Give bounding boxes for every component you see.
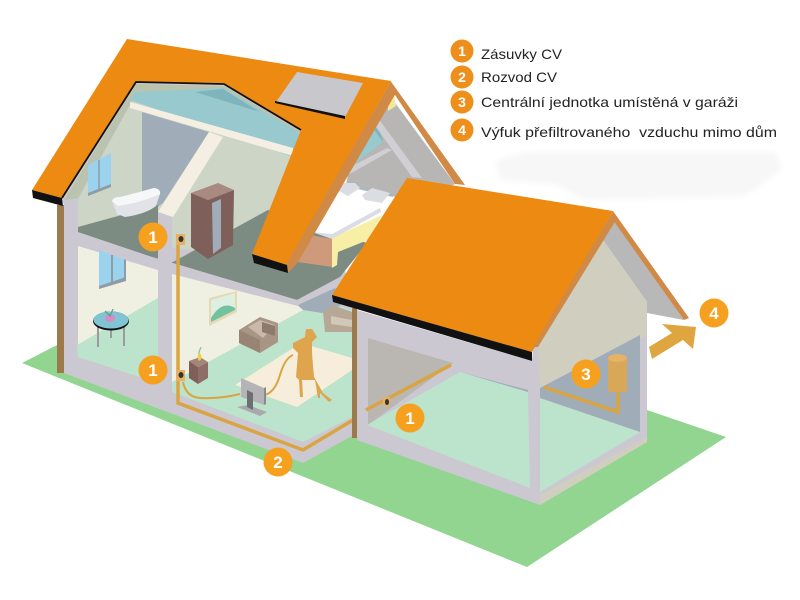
brown outer wall: [57, 205, 64, 373]
garage roof: [332, 178, 689, 361]
bed: [298, 183, 393, 268]
legend item 3: Centrální jednotka umístěná v garáži: [481, 94, 738, 110]
ceiling beam: [130, 102, 293, 156]
badge 1 downstairs: [138, 356, 168, 384]
legend item 2: Rozvod CV: [481, 69, 558, 85]
legend item 4: Výfuk přefiltrovaného vzduchu mimo dům: [481, 124, 777, 140]
garage structure: [357, 310, 647, 505]
pipe in garage: [366, 365, 451, 410]
legend item 4: 4: [458, 122, 466, 138]
wardrobe: [191, 183, 234, 259]
badge 2: 2: [273, 453, 283, 472]
pillar: [158, 212, 172, 400]
house body frame: [62, 82, 352, 463]
cross beam: [158, 132, 223, 217]
socket downstairs: [176, 370, 185, 381]
badge 4: [700, 298, 728, 328]
pipe to central unit: [544, 387, 618, 412]
brown post: [352, 308, 357, 438]
legend: [450, 40, 777, 142]
badge 1 downstairs: 1: [148, 361, 158, 380]
window lower: [99, 250, 126, 289]
sofa: [323, 305, 352, 332]
legend item 4: [450, 118, 777, 142]
lower left room: [77, 246, 158, 383]
garage back wall: [540, 335, 640, 432]
badge 3: [572, 360, 600, 388]
hose: [183, 355, 293, 398]
badge 1 garage: [396, 404, 424, 432]
window upper: [88, 153, 111, 196]
upper floor interior: [78, 88, 367, 300]
legend item 3: [450, 90, 738, 114]
legend item 1: Zásuvky CV: [481, 46, 563, 62]
picture: [209, 291, 237, 326]
garage socket: [383, 397, 390, 406]
garage gable: [603, 218, 684, 320]
lower right room: [172, 274, 352, 442]
bathtub: [112, 188, 160, 217]
badge 3: 3: [581, 365, 591, 384]
badge 1 garage: 1: [405, 409, 415, 428]
ceiling: [130, 88, 300, 157]
back wall: [142, 112, 209, 218]
floor slab: [78, 232, 342, 306]
legend item 1: [450, 40, 563, 62]
socket upstairs: [176, 234, 185, 245]
central unit: [608, 354, 627, 392]
armchair: [239, 317, 278, 353]
pipe: distribution: [178, 240, 353, 450]
monitor unit: [237, 378, 267, 416]
legend item 3: 3: [458, 94, 466, 110]
garage: [332, 178, 689, 505]
badge 4: 4: [709, 304, 719, 323]
back gable of main house: [345, 83, 465, 200]
roof window: [275, 72, 363, 119]
person vacuuming: [293, 329, 332, 402]
table: [93, 309, 129, 347]
rug: [235, 343, 352, 407]
side table with plant: [189, 347, 208, 384]
legend item 2: 2: [458, 69, 466, 85]
floor: [78, 205, 367, 300]
arrow: exhaust: [649, 324, 696, 359]
main roof: [32, 39, 396, 273]
legend item 2: [450, 66, 558, 88]
garage floor right: [540, 398, 640, 492]
ground: [22, 345, 726, 567]
badge 2: [264, 448, 292, 476]
garage floor left: [367, 372, 530, 488]
main house: [32, 39, 465, 463]
garage inner wall: [368, 338, 453, 425]
legend item 1: 1: [458, 43, 466, 59]
badge 1 upstairs: 1: [148, 228, 158, 247]
badge 1 upstairs: [138, 222, 168, 252]
